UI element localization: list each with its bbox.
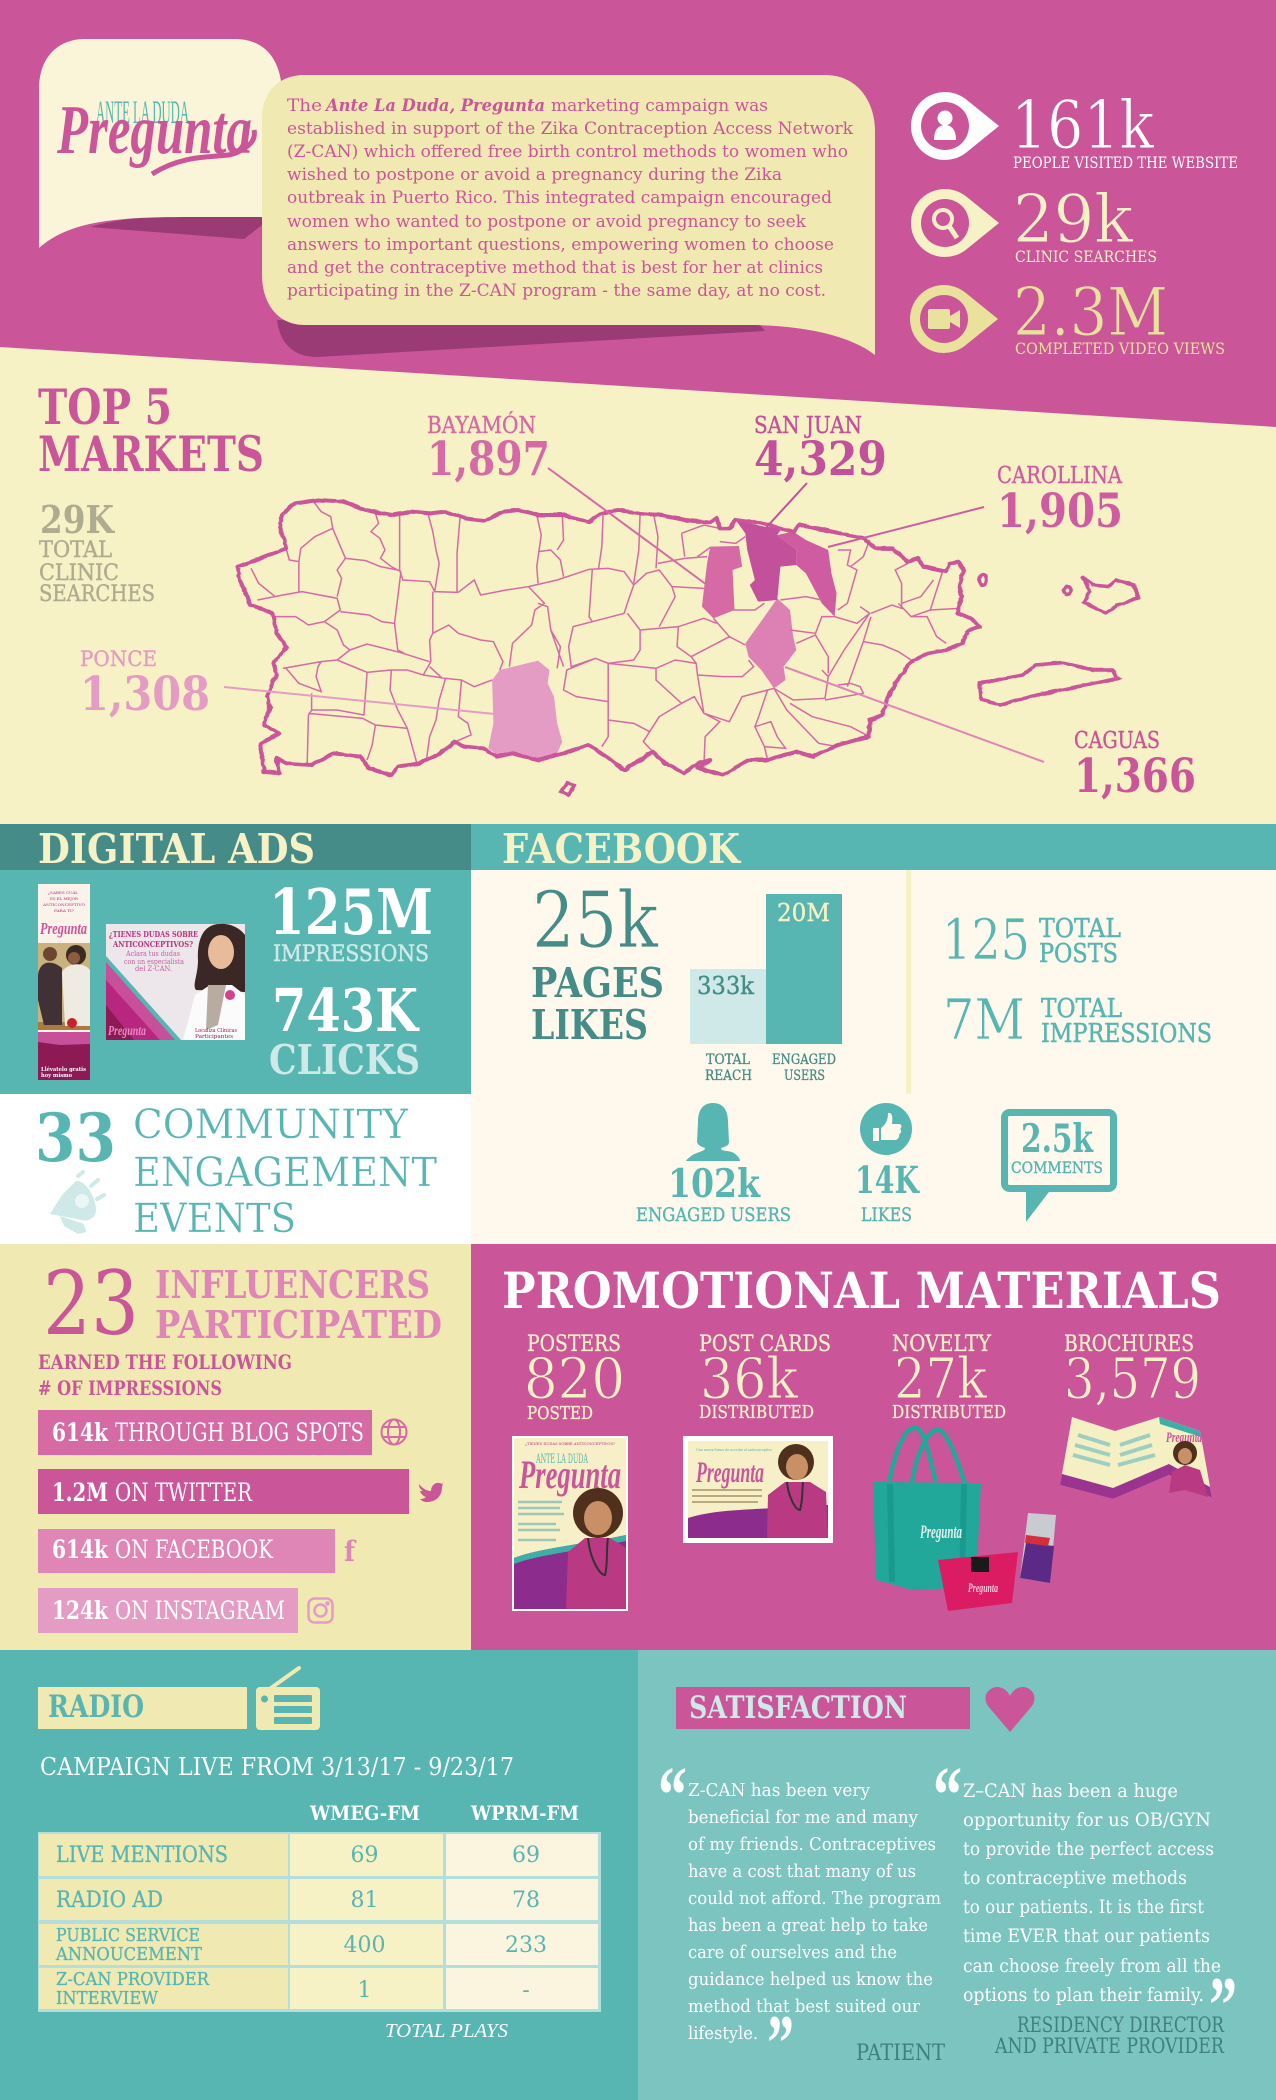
stat: clinic searches: 29k (1013, 181, 1134, 258)
bar chart: reach and engaged users: 20M (777, 899, 830, 927)
number 33: 33 (35, 1099, 116, 1177)
impressions subheading: EARNED THE FOLLOWING (38, 1350, 292, 1374)
table values: 1 (358, 1978, 372, 2003)
stat: total posts: POSTS (1039, 939, 1118, 969)
bar: blog spots (38, 1410, 372, 1455)
novelty items: tote bag, pouch, phone wallet: Pregunta (919, 1522, 962, 1543)
quote: provider: Z–CAN has been a huge (963, 1780, 1178, 1802)
heading: top 5 markets: TOP 5 (38, 378, 172, 436)
stat: comments bubble (1004, 1112, 1114, 1222)
market: Ponce (80, 647, 495, 722)
stat: post cards (699, 1332, 831, 1423)
intro text: outbreak in Puerto Rico. This integrated campaign encouraged (287, 188, 832, 207)
stat: novelty: DISTRIBUTED (892, 1402, 1006, 1423)
stat: novelty: NOVELTY (892, 1332, 991, 1357)
brochure image (1060, 1417, 1212, 1499)
row labels: RADIO AD (56, 1888, 163, 1913)
ad: woman doctor: con un especialista (124, 958, 184, 966)
table values: 81 (350, 1888, 378, 1913)
number 23: 23 (43, 1252, 139, 1355)
ad: woman doctor: Pregunta (108, 1024, 146, 1039)
row labels: PUBLIC SERVICE (56, 1925, 200, 1946)
quote: patient: ” (767, 2000, 794, 2088)
market: Caguas (785, 667, 1196, 804)
panel: top 5 markets (38, 378, 1196, 804)
post card image: Pregunta (695, 1456, 764, 1489)
market: San Juan: 4,329 (754, 432, 887, 487)
table values: 233 (505, 1933, 547, 1958)
ad: tall banner (38, 884, 90, 1080)
bar: facebook: ON FACEBOOK (115, 1535, 274, 1564)
stat: website visitors: PEOPLE VISITED THE WEBSITE (1013, 153, 1238, 172)
ad: tall banner: ES EL MEJOR (50, 896, 79, 901)
total clinic searches: SEARCHES (39, 582, 155, 607)
post card image: Una nueva forma de acceder al anticonceptivo (696, 1447, 772, 1452)
community engagement events text: ENGAGEMENT (133, 1150, 437, 1196)
stat: total impressions: TOTAL (1041, 994, 1122, 1024)
ad: tall banner: PARA TI? (54, 908, 74, 913)
bar: instagram: ON INSTAGRAM (115, 1596, 285, 1625)
ad: woman doctor: ANTICONCEPTIVOS? (112, 939, 193, 949)
ad: tall banner: ¿SABES CUÁL (48, 890, 78, 895)
map: Puerto Rico municipalities (238, 500, 1138, 795)
intro text: and get the contraceptive method that is best for her at clinics (287, 258, 823, 277)
icon: thumbs up (860, 1103, 912, 1155)
stat: 25k page likes: PAGES (531, 959, 664, 1007)
stat: posters: POSTED (527, 1403, 593, 1424)
stat: clicks (269, 976, 420, 1084)
icon: video camera pin (910, 285, 998, 353)
panel: digital ads (0, 824, 471, 1094)
row labels: INTERVIEW (56, 1988, 158, 2009)
offshore islands (560, 575, 1138, 795)
influencers participated heading (155, 1262, 442, 1347)
panel: community engagement (0, 1094, 471, 1244)
novelty items: tote bag, pouch, phone wallet: Pregunta (968, 1580, 998, 1595)
quote: patient: care of ourselves and the (688, 1942, 897, 1963)
panel: influencers (0, 1244, 471, 1650)
ad: woman doctor: ¿TIENES DUDAS SOBRE (109, 929, 198, 939)
table headers (309, 1801, 579, 1825)
stat: total posts (942, 908, 1121, 973)
quote: provider: can choose freely from all the (963, 1955, 1221, 1977)
intro text: (Z-CAN) which offered free birth control methods to women who (287, 142, 848, 161)
stat: novelty: 27k (894, 1347, 988, 1412)
intro text: The (287, 96, 322, 115)
icon: instagram (308, 1598, 332, 1622)
stat: video views (910, 274, 1225, 358)
quote: provider (933, 1752, 1237, 2058)
quote: provider: ” (1209, 1962, 1237, 2050)
quote: patient: method that best suited our (688, 1996, 920, 2017)
stat: total impressions (943, 988, 1212, 1053)
quote: provider: time EVER that our patients (963, 1925, 1210, 1947)
heading: radio (38, 1687, 247, 1729)
quote: provider: to provide the perfect access (963, 1838, 1214, 1860)
heading: radio: RADIO (48, 1689, 144, 1725)
impressions subheading (38, 1350, 292, 1400)
bar: instagram: 124k (52, 1596, 109, 1625)
stat: post cards: POST CARDS (699, 1332, 831, 1357)
stat: posters (524, 1332, 625, 1424)
stat: likes (855, 1103, 920, 1226)
community engagement events text: COMMUNITY (133, 1102, 409, 1148)
bar chart: reach and engaged users (690, 894, 842, 1084)
icon: magnifier pin (911, 189, 999, 257)
stat: impressions: IMPRESSIONS (273, 942, 429, 967)
quote: provider: “ (933, 1752, 962, 1840)
bar: instagram (38, 1588, 298, 1633)
bar chart: reach and engaged users: REACH (705, 1068, 752, 1084)
stat: brochures: 3,579 (1064, 1347, 1201, 1412)
poster image: Pregunta (518, 1452, 621, 1497)
quote: patient: have a cost that many of us (688, 1861, 916, 1882)
intro speech bubble (262, 75, 875, 357)
stat: clicks: 743K (272, 976, 420, 1045)
poster image: ¿TIENES DUDAS SOBRE ANTICONCEPTIVOS? (525, 1441, 615, 1446)
ad: tall banner: hoy mismo (41, 1073, 72, 1079)
stat: total posts: 125 (942, 908, 1030, 973)
table: radio plays (38, 1801, 601, 2012)
heading: digital ads: DIGITAL ADS (38, 825, 315, 873)
ad: woman doctor: Localiza Clínicas (195, 1027, 237, 1034)
bar: blog spots: THROUGH BLOG SPOTS (115, 1418, 364, 1447)
quote: patient (658, 1752, 945, 2088)
quote: patient: beneficial for me and many (688, 1807, 919, 1828)
market: Ponce: PONCE (80, 647, 157, 671)
total clinic searches: 29K (40, 497, 116, 542)
market: Bayamon: 1,897 (427, 432, 550, 487)
total clinic searches: CLINIC (39, 561, 119, 586)
market: Carolina: 1,905 (997, 484, 1123, 539)
market: Ponce: 1,308 (80, 667, 210, 722)
market: San Juan (754, 413, 887, 530)
total plays note: TOTAL PLAYS (385, 2020, 508, 2042)
table values: - (522, 1978, 530, 2003)
stat: posters: POSTERS (527, 1332, 621, 1357)
stat: website visitors (911, 87, 1238, 172)
quote: provider: opportunity for us OB/GYN (963, 1809, 1211, 1831)
bar: twitter (38, 1469, 409, 1514)
market: Caguas: 1,366 (1074, 749, 1196, 804)
stat: novelty (892, 1332, 1006, 1423)
ad: woman doctor: Participantes (195, 1034, 233, 1040)
quote: patient: lifestyle. (688, 2023, 758, 2044)
quote: patient: “ (658, 1752, 687, 1840)
quote: patient: has been a great help to take (688, 1915, 928, 1936)
quote: provider: AND PRIVATE PROVIDER (994, 2034, 1225, 2058)
panel: promotional materials (471, 1244, 1276, 1650)
bar: facebook: 614k (52, 1535, 109, 1564)
table values: 78 (512, 1888, 540, 1913)
municipality borders (251, 502, 959, 767)
bar: blog spots: 614k (52, 1418, 109, 1447)
quote: patient: could not afford. The program (688, 1888, 941, 1909)
heading: satisfaction: SATISFACTION (689, 1690, 907, 1726)
quote: patient: Z-CAN has been very (688, 1780, 871, 1801)
heading: facebook: FACEBOOK (502, 825, 741, 873)
highlighted municipalities (488, 520, 837, 760)
bar chart: reach and engaged users: USERS (784, 1068, 825, 1084)
stat: video views: COMPLETED VIDEO VIEWS (1015, 339, 1225, 358)
heading: top 5 markets: MARKETS (38, 425, 264, 483)
stat: 25k page likes (531, 876, 664, 1049)
intro text: Ante La Duda, Pregunta (324, 96, 545, 115)
logo speech bubble (39, 39, 282, 248)
stat: impressions (269, 875, 433, 967)
quote: patient: PATIENT (856, 2041, 945, 2066)
panel: satisfaction (638, 1650, 1276, 2100)
quote: provider: RESIDENCY DIRECTOR (1017, 2013, 1225, 2037)
icon: person pin (911, 92, 999, 160)
row labels: LIVE MENTIONS (56, 1843, 228, 1868)
stat: post cards: DISTRIBUTED (699, 1402, 814, 1423)
bar chart: reach and engaged users: TOTAL (706, 1052, 750, 1068)
intro text (287, 96, 854, 300)
stat: 25k page likes: 25k (532, 876, 659, 966)
total clinic searches: TOTAL (39, 538, 112, 563)
icon: heart (985, 1687, 1035, 1732)
stat: video views: 2.3M (1013, 274, 1168, 351)
post card image (683, 1436, 833, 1543)
novelty items: tote bag, pouch, phone wallet (873, 1428, 1056, 1611)
row labels (55, 1843, 228, 2009)
table values: 400 (344, 1933, 386, 1958)
market: San Juan: SAN JUAN (754, 413, 862, 439)
icon: woman silhouette (686, 1103, 740, 1161)
quote: provider: options to plan their family. (963, 1984, 1204, 2006)
stat: total impressions: 7M (943, 988, 1025, 1053)
ad: woman doctor: Aclara tus dudas (125, 950, 180, 958)
icon: twitter bird (419, 1482, 443, 1502)
stat: brochures: BROCHURES (1064, 1332, 1194, 1357)
stat: engaged users (636, 1103, 791, 1226)
market: Carolina (828, 463, 1123, 547)
influencers participated heading: INFLUENCERS (155, 1262, 430, 1307)
row labels: ANNOUCEMENT (55, 1944, 202, 1965)
intro text: answers to important questions, empowering women to choose (287, 235, 834, 254)
table headers: WPRM-FM (470, 1801, 579, 1825)
bar chart: reach and engaged users: ENGAGED (772, 1052, 836, 1068)
stat: comments bubble: COMMENTS (1011, 1158, 1103, 1177)
ad: woman doctor: del Z-CAN. (135, 965, 172, 973)
stat: clinic searches (911, 181, 1157, 266)
ad: tall banner: Llévatelo gratis (41, 1066, 86, 1073)
intro text: wished to postpone or avoid a pregnancy during the Zika (287, 165, 782, 184)
stat: engaged users: ENGAGED USERS (636, 1204, 791, 1226)
stat: post cards: 36k (700, 1347, 799, 1412)
row labels: Z-CAN PROVIDER (56, 1969, 209, 1990)
stat: impressions: 125M (269, 875, 433, 949)
brochure image: Pregunta (1166, 1430, 1202, 1446)
bar chart: reach and engaged users: 333k (697, 972, 754, 1000)
community engagement events text (133, 1102, 437, 1242)
panel: radio (0, 1650, 638, 2100)
intro text: women who wanted to postpone or avoid pregnancy to seek (287, 212, 807, 231)
stat: comments bubble: 2.5k (1021, 1116, 1094, 1162)
stat: total posts: TOTAL (1039, 914, 1121, 944)
bar: twitter: 1.2M (52, 1478, 108, 1507)
quote: patient: guidance helped us know the (688, 1969, 933, 1990)
icon: facebook f: f (344, 1535, 357, 1568)
ad: tall banner: Pregunta (39, 919, 87, 938)
stat: total impressions: IMPRESSIONS (1041, 1019, 1212, 1049)
market: Bayamon: BAYAMÓN (427, 412, 536, 439)
panel: facebook (471, 824, 1276, 1244)
stat: likes: LIKES (861, 1204, 912, 1226)
ad: tall banner: ANTICONCEPTIVO (42, 902, 86, 907)
icon: megaphone (50, 1172, 104, 1234)
icon: globe (382, 1420, 406, 1444)
stat: likes: 14K (855, 1158, 920, 1202)
stat: engaged users: 102k (668, 1161, 761, 1207)
community engagement events text: EVENTS (133, 1196, 296, 1242)
heading: top 5 markets (38, 378, 264, 483)
quote: provider: to contraceptive methods (963, 1867, 1187, 1889)
panel: header (0, 0, 1276, 440)
table values (344, 1843, 547, 2003)
poster image (512, 1436, 628, 1611)
campaign dates: CAMPAIGN LIVE FROM 3/13/17 - 9/23/17 (40, 1753, 514, 1781)
intro text: established in support of the Zika Contraception Access Network (287, 119, 854, 138)
total clinic searches (39, 497, 155, 607)
icon: radio (256, 1668, 320, 1730)
table values: 69 (350, 1843, 378, 1868)
bar: facebook (38, 1529, 335, 1573)
island outline (238, 500, 979, 775)
stat: 25k page likes: LIKES (531, 1001, 648, 1049)
stat: clicks: CLICKS (269, 1036, 420, 1084)
influencers participated heading: PARTICIPATED (155, 1302, 442, 1347)
stat: website visitors: 161k (1011, 87, 1155, 164)
market: Bayamon (427, 412, 707, 585)
stat: posters: 820 (524, 1347, 625, 1412)
impressions subheading: # OF IMPRESSIONS (38, 1376, 222, 1400)
bar: twitter: ON TWITTER (115, 1478, 253, 1507)
logo speech bubble: Pregunta (56, 92, 252, 169)
table values: 69 (512, 1843, 540, 1868)
intro text: marketing campaign was (551, 96, 768, 115)
quote: provider: to our patients. It is the first (963, 1896, 1204, 1918)
logo speech bubble: ANTE LA DUDA (96, 95, 189, 131)
market: Carolina: CAROLLINA (997, 463, 1122, 489)
table headers: WMEG-FM (309, 1801, 420, 1825)
ad: woman doctor (106, 924, 245, 1040)
intro text: participating in the Z-CAN program - the same day, at no cost. (287, 281, 826, 300)
quote: patient: of my friends. Contraceptives (688, 1834, 936, 1855)
poster image: ANTE LA DUDA (536, 1452, 588, 1467)
stat: clinic searches: CLINIC SEARCHES (1015, 247, 1157, 266)
market: Caguas: CAGUAS (1074, 728, 1160, 754)
